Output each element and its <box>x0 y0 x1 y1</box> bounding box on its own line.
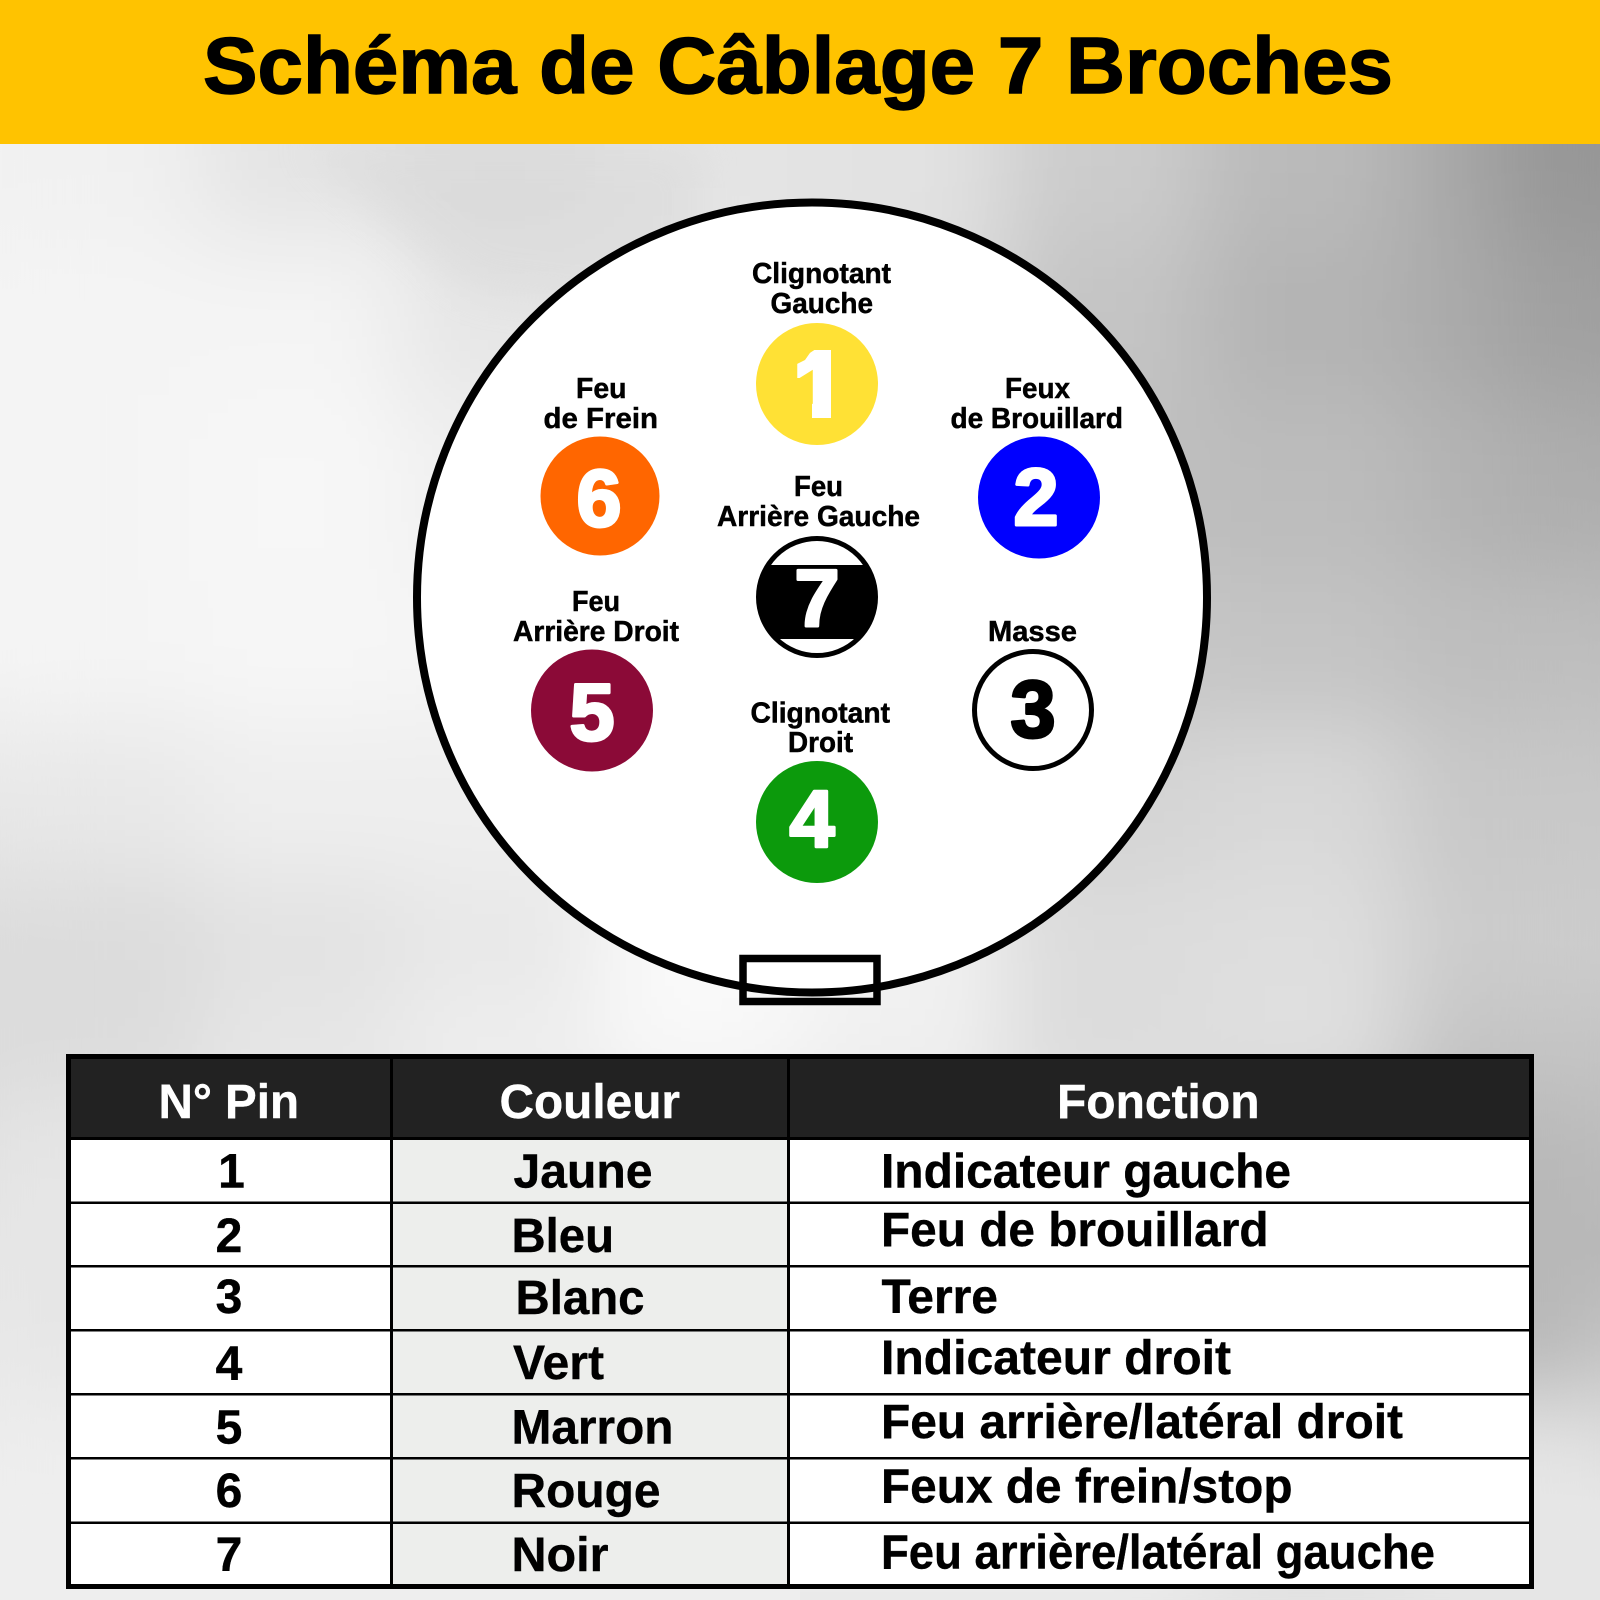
function descriptions column: Terre <box>882 1271 998 1324</box>
colour column shading <box>392 1138 788 1587</box>
pin 4: right indicator: Droit <box>788 727 853 759</box>
pin 2: fog light <box>950 373 1123 558</box>
pin 3: ground: 3 <box>1010 665 1056 755</box>
colour names column: Bleu <box>512 1210 614 1263</box>
pin 2: fog light: de Brouillard <box>950 403 1123 435</box>
table grid lines <box>68 1056 1532 1587</box>
pin 6: brake light <box>540 373 660 556</box>
table header labels <box>158 1076 1260 1129</box>
colour names column <box>512 1146 674 1582</box>
pin 1: left indicator: 1 <box>794 332 847 437</box>
pin numbers column: 7 <box>216 1529 242 1582</box>
table header background <box>66 1054 1534 1140</box>
colour names column: Vert <box>513 1337 604 1390</box>
function descriptions column: Indicateur gauche <box>881 1146 1291 1198</box>
pin numbers column <box>216 1146 245 1582</box>
function descriptions column: Feu arrière/latéral gauche <box>881 1526 1435 1580</box>
function descriptions column <box>881 1146 1435 1580</box>
pin numbers column: 6 <box>216 1465 242 1518</box>
pin 3: ground: Masse <box>988 616 1077 648</box>
pin 4: right indicator <box>750 698 890 883</box>
pin 4: right indicator: Clignotant <box>750 698 890 730</box>
pin 7: left tail light: Feu <box>794 471 843 503</box>
pin 3: ground <box>974 616 1092 768</box>
pin numbers column: 5 <box>216 1402 242 1454</box>
pin 5: right tail light: 5 <box>569 668 615 758</box>
table header labels: Couleur <box>500 1076 680 1129</box>
pin 5: right tail light: Feu <box>572 586 620 618</box>
pin 2: fog light: Feux <box>1005 373 1070 405</box>
pin numbers column: 1 <box>218 1146 245 1198</box>
pin 1: left indicator <box>752 258 891 445</box>
pin 7: left tail light <box>717 471 920 656</box>
pin 4: right indicator: 4 <box>789 775 835 865</box>
pin 6: brake light: 6 <box>576 454 622 544</box>
pin 7: left tail light: Arrière Gauche <box>717 501 920 533</box>
function descriptions column: Indicateur droit <box>881 1332 1231 1385</box>
colour names column: Marron <box>512 1402 674 1454</box>
function descriptions column: Feu arrière/latéral droit <box>881 1396 1403 1449</box>
pin 2: fog light: 2 <box>1013 453 1059 543</box>
function descriptions column: Feux de frein/stop <box>881 1460 1292 1514</box>
connector diagram <box>417 202 1207 1002</box>
pin table <box>66 1054 1534 1587</box>
colour names column: Jaune <box>514 1146 652 1198</box>
pin 7: left tail light: 7 <box>794 554 840 644</box>
pin numbers column: 3 <box>216 1271 242 1324</box>
connector key notch <box>743 958 877 1002</box>
pin numbers column: 2 <box>216 1210 242 1263</box>
pin 1: left indicator: Clignotant <box>752 258 891 290</box>
connector outline <box>417 202 1207 992</box>
colour names column: Noir <box>512 1529 608 1582</box>
table header labels: Fonction <box>1057 1076 1260 1129</box>
title banner <box>0 0 1600 144</box>
pin 1: left indicator: Gauche <box>770 288 873 320</box>
pin numbers column: 4 <box>216 1338 243 1391</box>
pin 6: brake light: de Frein <box>544 403 658 435</box>
table body background <box>68 1138 1532 1587</box>
table header labels: N° Pin <box>158 1076 299 1129</box>
table outer border <box>68 1056 1532 1586</box>
pin 6: brake light: Feu <box>576 373 626 405</box>
title: Schéma de Câblage 7 Broches <box>203 21 1393 110</box>
colour names column: Rouge <box>512 1465 660 1518</box>
function descriptions column: Feu de brouillard <box>881 1204 1268 1257</box>
colour names column: Blanc <box>516 1272 644 1325</box>
pin 5: right tail light: Arrière Droit <box>513 616 679 648</box>
pin 5: right tail light <box>513 586 679 772</box>
